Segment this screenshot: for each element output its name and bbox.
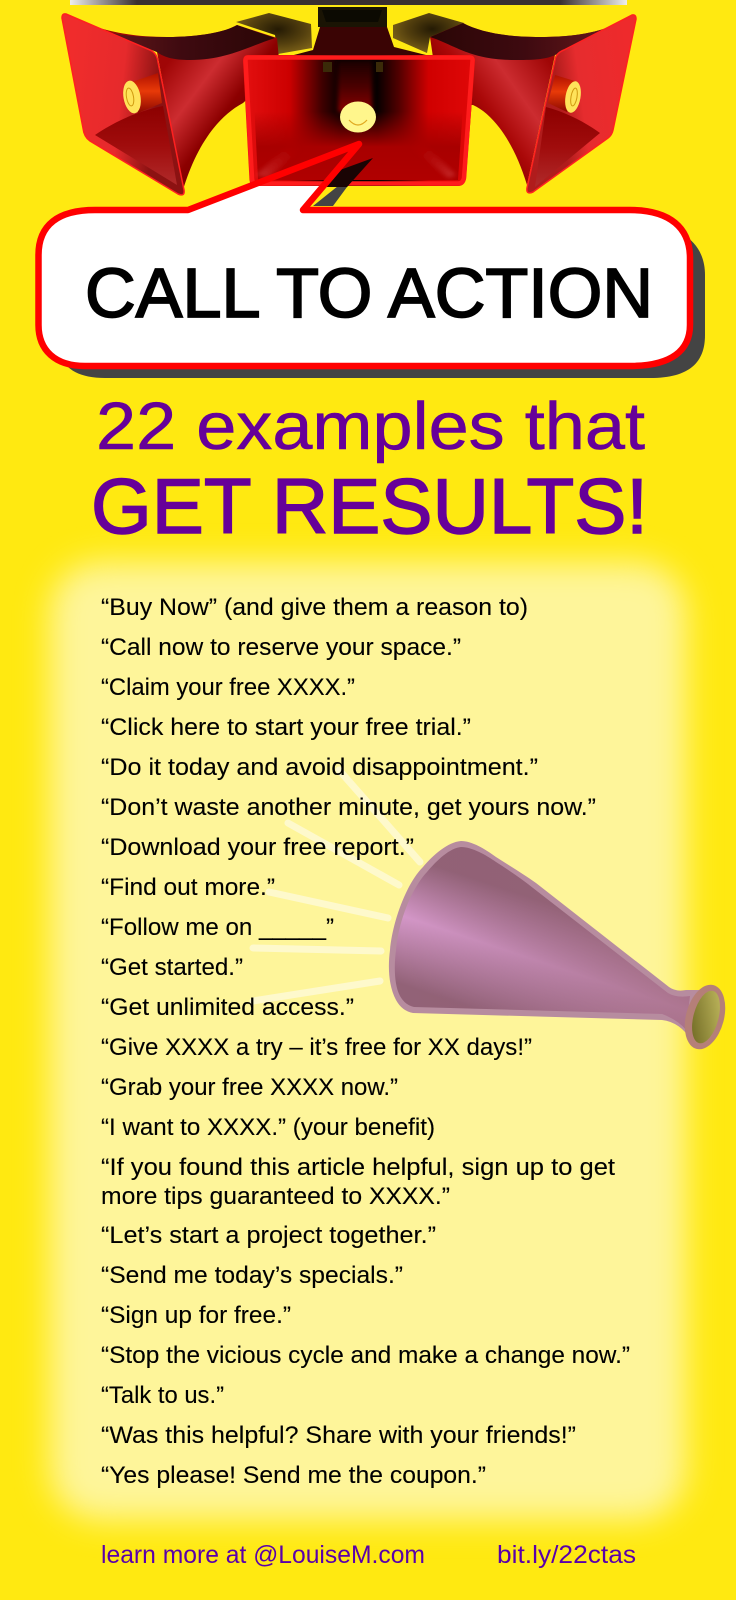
top bar [70,0,627,5]
footer: learn more: learn more at @LouiseM.com [101,1541,425,1569]
list of call to action examples: “Get unlimited access.” [101,994,354,1021]
list of call to action examples: “Buy Now” (and give them a reason to) [101,594,528,621]
heading: get results: GET RESULTS! [91,462,648,550]
megaphone body [395,847,690,1030]
speech bubble outline [38,144,690,366]
center horn face [243,55,475,186]
center horn rim [246,58,473,184]
right horn driver [563,80,583,114]
list of call to action examples: “Claim your free XXXX.” [101,674,355,701]
list of call to action examples: “Do it today and avoid disappointment.” [101,754,538,781]
list of call to action examples: “Click here to start your free trial.” [101,714,471,741]
list of call to action examples: more tips guaranteed to XXXX.” [101,1183,450,1210]
icon: loudspeaker horns [62,0,636,195]
left horn inner shadow [95,106,177,185]
right horn body [430,15,635,185]
list of call to action examples: “Grab your free XXXX now.” [101,1074,398,1101]
list of call to action examples: “Talk to us.” [101,1382,224,1409]
list of call to action examples: “Download your free report.” [101,834,414,861]
megaphone opening [687,988,725,1046]
list of call to action examples: “Give XXXX a try – it’s free for XX days!” [101,1034,532,1061]
right horn tube [548,75,578,112]
left horn face [62,14,184,195]
list of call to action examples [101,594,630,1489]
right horn inner shadow [535,107,600,187]
list of call to action examples: “If you found this article helpful, sign up to get [101,1154,615,1181]
left horn tube [132,73,162,113]
list of call to action examples: “Let’s start a project together.” [101,1222,436,1249]
megaphone outer rim [389,841,700,1041]
center neck [290,27,430,56]
list of call to action examples: “Follow me on _____” [101,914,334,941]
rays from megaphone [253,770,420,1001]
shadow over center horn [322,158,373,187]
panel: pale glow behind list [50,562,686,1520]
list of call to action examples: “Don’t waste another minute, get yours now.” [101,794,596,821]
list of call to action examples: “Find out more.” [101,874,275,901]
left horn driver [121,79,143,115]
center horn [243,55,475,186]
list of call to action examples: “Was this helpful? Share with your friends!” [101,1422,576,1449]
list of call to action examples: “Sign up for free.” [101,1302,291,1329]
list of call to action examples: “Call now to reserve your space.” [101,634,461,661]
left horn body [63,14,280,190]
center mount [318,7,387,27]
title: call to action: CALL TO ACTION [85,254,653,332]
megaphone mouthpiece [678,980,732,1054]
center horn legs [323,62,383,72]
list of call to action examples: “Stop the vicious cycle and make a change now.” [101,1342,630,1369]
left horn [62,14,280,195]
list of call to action examples: “I want to XXXX.” (your benefit) [101,1114,435,1141]
icon: purple megaphone [389,841,732,1054]
right horn [430,15,636,193]
center horn pipe [338,61,372,112]
right horn face [527,15,636,193]
footer: short link: bit.ly/22ctas [497,1541,636,1569]
list of call to action examples: “Get started.” [101,954,243,981]
center horn creases [256,140,300,178]
center horn driver [340,102,376,132]
right horn dark band [430,23,620,60]
heading: 22 examples that: 22 examples that [96,389,645,464]
left horn dark band [90,25,275,60]
list of call to action examples: “Send me today’s specials.” [101,1262,403,1289]
left bracket [236,13,312,54]
speech bubble fill [38,144,690,366]
list of call to action examples: “Yes please! Send me the coupon.” [101,1462,486,1489]
right bracket [393,13,464,53]
speech bubble shadow [60,158,705,378]
